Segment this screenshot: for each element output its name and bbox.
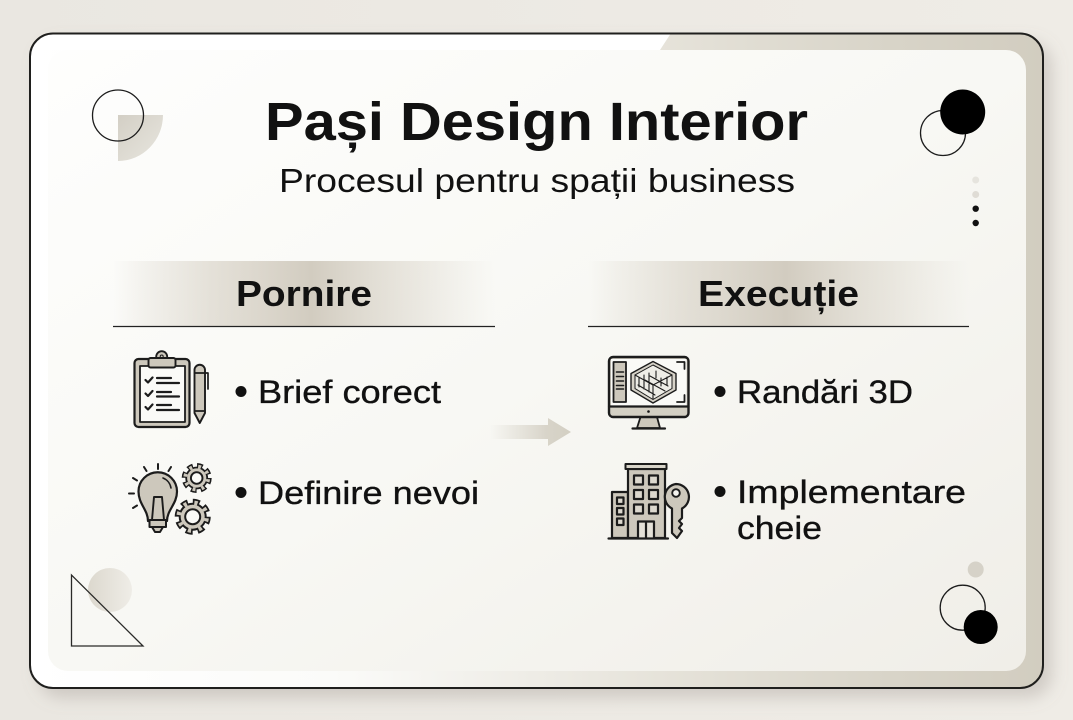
bullet text: Definire nevoi: Definire nevoi <box>258 475 479 511</box>
heading band: Execuție <box>588 261 969 326</box>
inner panel <box>48 50 1026 671</box>
icon: upper gear <box>184 466 209 490</box>
bullet text: Brief corect: Brief corect <box>258 374 441 410</box>
bullet text: Implementare cheie <box>714 474 966 546</box>
icon: lower gear <box>178 502 208 532</box>
icon: monitor with 3D room <box>609 357 688 428</box>
arrow <box>490 418 571 446</box>
decoration: bottom-right circles <box>940 562 998 644</box>
heading: Execuție: Execuție <box>698 273 859 315</box>
decoration: bottom-left circle and triangle <box>72 568 143 646</box>
bullet text: Implementare cheie: Implementare <box>737 474 966 510</box>
icon: light bulb and gears <box>129 464 209 532</box>
heading band: Pornire <box>113 261 495 326</box>
bullet text: Randări 3D: Randări 3D <box>737 374 913 410</box>
panel: Pornire <box>113 261 495 532</box>
icon: clipboard and pen <box>134 351 208 427</box>
decoration: top-right circles <box>920 90 985 156</box>
bullet text: Implementare cheie: cheie <box>737 510 822 546</box>
decoration: vertical dots <box>972 176 979 226</box>
subtitle: Procesul pentru spații business <box>279 162 795 199</box>
panel: Execuție <box>588 261 969 546</box>
title: Pași Design Interior <box>265 92 808 153</box>
decoration: top-left circle and quarter <box>92 90 163 161</box>
heading: Pornire: Pornire <box>236 273 372 314</box>
icon: building and key <box>608 464 689 538</box>
